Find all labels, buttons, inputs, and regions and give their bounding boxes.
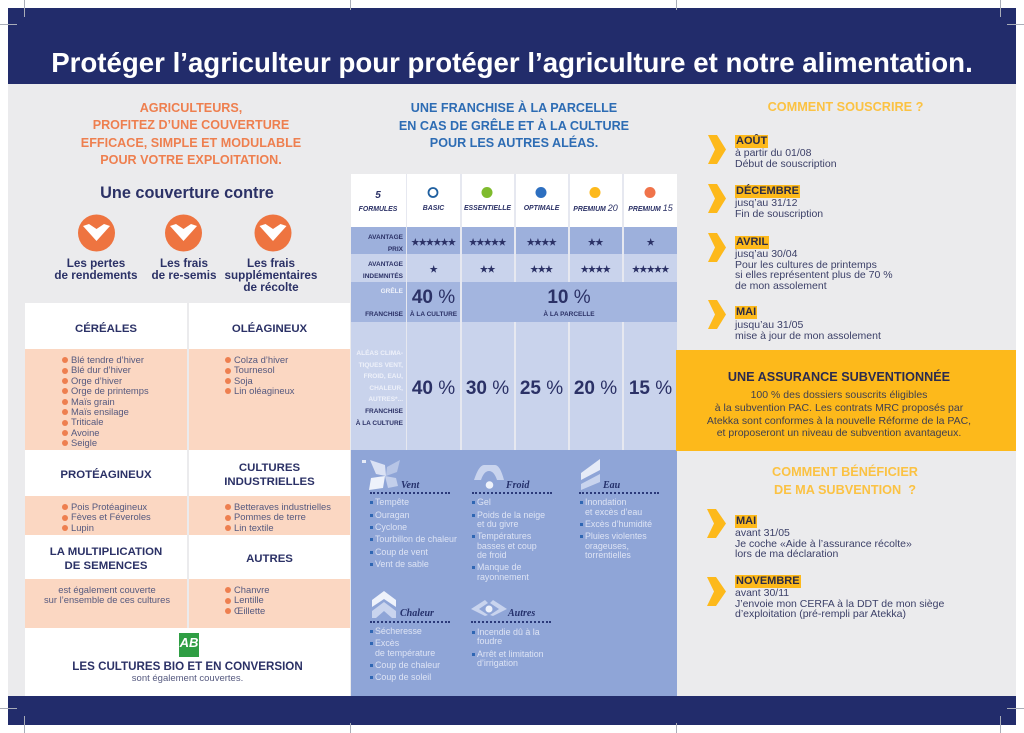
value: 40 pct: 40 % (412, 378, 455, 399)
right heading: comment beneficier: COMMENT BÉNÉFICIER (772, 465, 918, 479)
detail: à partir du 01/08 (735, 147, 811, 159)
list: autres (472, 627, 544, 668)
detail: jusq’au 30/04 (735, 248, 797, 260)
list: froid: Poids de la neige (477, 510, 545, 520)
list: chaleur: de température (375, 648, 435, 658)
month: DÉCEMBRE (736, 185, 799, 197)
right heading: comment beneficier (677, 464, 1013, 499)
list: cereales: Blé tendre d’hiver (71, 354, 144, 365)
list: cereales: Blé dur d’hiver (71, 364, 131, 375)
column separators (406, 174, 407, 450)
middle heading: POUR LES AUTRES ALÉAS. (430, 136, 598, 150)
header band with title (8, 8, 1016, 84)
heading: froid: Froid (506, 480, 529, 491)
middle heading: EN CAS DE GRÊLE ET À LA CULTURE (399, 118, 629, 132)
list: chaleur: Coup de soleil (375, 672, 431, 682)
detail (735, 247, 893, 291)
left heading: PROFITEZ D’UNE COUVERTURE (93, 118, 289, 132)
list: eau: Inondation (585, 497, 626, 507)
heading: cultures industrielles (224, 462, 315, 488)
heading: multiplication de semences (50, 546, 162, 572)
column separator (187, 303, 188, 628)
list: froid (472, 497, 545, 582)
list: chaleur (370, 626, 440, 682)
value: 20 pct: 20 % (574, 378, 617, 399)
label: frais de re-semis: de re-semis (152, 269, 216, 282)
label: aleas climatiques: ALÉAS CLIMA- (356, 350, 403, 357)
footer band (8, 696, 1016, 725)
label: frais supplementaires: de récolte (243, 281, 299, 294)
text: semences: sur l’ensemble de ces cultures (44, 594, 170, 605)
label: frais supplementaires (225, 257, 317, 294)
heading: multiplication de semences: DE SEMENCES (65, 560, 147, 572)
list: chaleur: Sécheresse (375, 626, 422, 636)
detail: avant 30/11 (735, 587, 789, 599)
list: oleagineux: Lin oléagineux (234, 385, 294, 396)
label: aleas climatiques: TIQUES VENT, (359, 362, 403, 369)
text: semences (44, 584, 170, 605)
title: Protéger l’agriculteur pour protéger l’agriculture et notre alimentation. (51, 47, 973, 78)
label: avantage indemnites: AVANTAGE (368, 261, 403, 268)
detail: Fin de souscription (735, 208, 823, 220)
icons: yellow chevrons (707, 135, 726, 606)
label: frais supplementaires: Les frais (247, 257, 295, 270)
text: semences: est également couverte (58, 584, 156, 595)
list: eau: et excès d’eau (585, 507, 642, 517)
detail: de mon assolement (735, 280, 827, 292)
list: vent: Tempête (375, 497, 409, 507)
label: 5 formules: 5 (375, 190, 381, 201)
detail: mise à jour de mon assolement (735, 330, 881, 342)
heading: eau: Eau (603, 480, 620, 491)
callout text: Atekka sont conformes à la nouvelle Réforme de la PAC, (707, 415, 971, 427)
detail (734, 197, 823, 220)
label: optimale: OPTIMALE (524, 205, 559, 212)
label: pertes de rendements (54, 257, 138, 282)
detail: d’exploitation (pré-rempli par Atekka) (735, 608, 906, 620)
list: autres (225, 584, 269, 616)
label: aleas climatiques: FROID, EAU, (364, 373, 403, 380)
label: franchise: FRANCHISE (365, 311, 403, 318)
detail: jusqu’au 31/05 (735, 319, 803, 331)
heading: proteagineux: PROTÉAGINEUX (60, 469, 152, 481)
list: oleagineux: Soja (234, 375, 253, 386)
heading: autres: AUTRES (246, 553, 293, 565)
list: cereales: Orge d’hiver (71, 375, 122, 386)
list: oleagineux (225, 354, 294, 396)
row: grele (351, 282, 677, 322)
list: chaleur: Coup de chaleur (375, 660, 440, 670)
step: mai declaration (735, 515, 925, 559)
month: AOÛT (736, 135, 767, 147)
list: froid: Températures (477, 531, 531, 541)
list: vent: Cyclone (375, 522, 407, 532)
panel: formulas table (351, 174, 677, 450)
month: NOVEMBRE (736, 575, 800, 587)
left heading: POUR VOTRE EXPLOITATION. (100, 153, 282, 167)
label: frais de re-semis: Les frais (160, 257, 208, 270)
caption: a la parcelle: À LA PARCELLE (543, 311, 595, 318)
list: eau: Pluies violentes (585, 531, 647, 541)
label: pertes de rendements: de rendements (54, 269, 138, 282)
list: eau (580, 497, 652, 560)
label: grele franchise: GRÊLE (381, 288, 403, 295)
panel: crops table (25, 303, 350, 696)
callout text: et proposeront un niveau de subvention avantageux. (717, 427, 961, 439)
label: aleas climatiques: CHALEUR, (369, 385, 403, 392)
detail: lors de ma déclaration (735, 548, 838, 560)
text: ★★ (588, 238, 603, 248)
list: cereales: Avoine (71, 427, 100, 438)
heading: chaleur: Chaleur (400, 608, 434, 619)
detail (735, 147, 837, 170)
list: autres: d’irrigation (477, 658, 518, 668)
detail: si elles représentent plus de 70 % (735, 269, 893, 281)
right heading: comment beneficier: DE MA SUBVENTION ? (774, 482, 916, 496)
label: pertes de rendements: Les pertes (67, 257, 125, 270)
list: cereales: Triticale (71, 416, 103, 427)
list: cereales: Maïs ensilage (71, 406, 129, 417)
callout heading: UNE ASSURANCE SUBVENTIONNÉE (728, 370, 950, 384)
left heading: EFFICACE, SIMPLE ET MODULABLE (81, 136, 301, 150)
detail: Début de souscription (735, 158, 837, 170)
left heading (81, 101, 301, 167)
list: vent: Tourbillon de chaleur (375, 534, 457, 544)
text: ★★★ (531, 265, 552, 275)
label: 5 formules (358, 190, 398, 213)
list: froid: de froid (477, 550, 507, 560)
label: avantage prix (368, 234, 403, 253)
list: froid: basses et coup (477, 541, 537, 551)
text: ★★★★★ (469, 238, 506, 248)
value: 15 pct: 15 % (629, 378, 672, 399)
rule: froid (472, 492, 552, 494)
label: essentielle: ESSENTIELLE (464, 205, 511, 212)
text: ★★★★★ (632, 265, 669, 275)
icons: perils (362, 459, 600, 618)
icon: AB logo (179, 633, 199, 657)
list: cultures industrielles: Betteraves industrielles (234, 501, 331, 512)
rule: eau (579, 492, 659, 494)
list: proteagineux: Lupin (71, 522, 94, 533)
list: vent: Ouragan (375, 510, 410, 520)
detail: jusq’au 31/12 (735, 197, 797, 209)
list: cultures industrielles: Lin textile (234, 522, 274, 533)
heading: cultures industrielles: INDUSTRIELLES (224, 476, 315, 488)
list: proteagineux (62, 501, 151, 533)
rule: autres (471, 620, 551, 622)
heading: multiplication de semences: LA MULTIPLICATION (50, 546, 162, 558)
text: ★ (647, 238, 654, 248)
callout text: à la subvention PAC. Les contrats MRC proposés par (715, 402, 963, 414)
list: cultures industrielles (225, 501, 331, 533)
list: vent (370, 497, 457, 569)
list: cereales: Orge de printemps (71, 385, 149, 396)
label: frais de re-semis (152, 257, 216, 282)
list: cereales: Seigle (71, 437, 97, 448)
subheading: une couverture contre: Une couverture contre (100, 184, 274, 202)
callout text (676, 389, 1002, 440)
label: aleas climatiques: FRANCHISE (365, 408, 403, 415)
list: cultures industrielles: Pommes de terre (234, 511, 306, 522)
icons: formula dots (428, 187, 656, 198)
detail (735, 528, 912, 560)
value: 40 pct grele: 40 % (412, 287, 455, 308)
right heading: comment souscrire: COMMENT SOUSCRIRE ? (768, 100, 923, 114)
rule: vent (370, 492, 450, 494)
label: avantage prix: PRIX (388, 246, 403, 253)
label: avantage indemnites (363, 261, 403, 280)
detail: Je coche «Aide à l’assurance récolte» (735, 538, 912, 550)
month: MAI (736, 515, 756, 527)
stars: indemnites: ★ (430, 265, 437, 275)
row: avantage indemnites (351, 254, 677, 282)
list: autres: Chanvre (234, 584, 269, 595)
step: aout (735, 134, 837, 170)
list: oleagineux: Colza d’hiver (234, 354, 288, 365)
heading: cereales: CÉRÉALES (75, 323, 137, 335)
label: basic: BASIC (423, 205, 444, 212)
list: eau: torrentielles (585, 550, 631, 560)
row: aleas (351, 322, 677, 450)
step: mai (735, 306, 885, 340)
callout text: 100 % des dossiers souscrits éligibles (751, 389, 927, 401)
caption: a la culture: À LA CULTURE (410, 311, 457, 318)
row: avantage prix (351, 227, 677, 254)
list: proteagineux: Fèves et Féveroles (71, 511, 151, 522)
left heading: AGRICULTEURS, (140, 101, 242, 115)
detail: J’envoie mon CERFA à la DDT de mon siège (735, 598, 944, 610)
list: proteagineux: Pois Protéagineux (71, 501, 147, 512)
step: avril (734, 236, 893, 292)
icon: AB logo: AB (180, 635, 198, 650)
heading: vent: Vent (401, 480, 419, 491)
detail (735, 320, 881, 341)
heading: oleagineux: OLÉAGINEUX (232, 323, 307, 335)
list: eau: Excès d’humidité (585, 519, 652, 529)
callout: assurance subventionnee (676, 350, 1016, 451)
list: froid: et du givre (477, 519, 518, 529)
label: aleas climatiques: À LA CULTURE (356, 420, 403, 427)
text: ★★★★ (527, 238, 556, 248)
heading: autres: Autres (508, 608, 535, 619)
detail: avant 31/05 (735, 527, 790, 539)
icons: orange chevrons (78, 214, 292, 252)
month: AVRIL (736, 236, 768, 248)
label: premium 20: PREMIUM 20 (573, 203, 618, 213)
value: 25 pct: 25 % (520, 378, 563, 399)
list: froid: Gel (477, 497, 491, 507)
list: vent: Coup de vent (375, 547, 428, 557)
heading: cultures industrielles: CULTURES (239, 462, 300, 474)
value: 10 pct grele: 10 % (547, 287, 591, 308)
label: avantage prix: AVANTAGE (368, 234, 403, 241)
detail (735, 588, 944, 620)
list: eau: orageuses, (585, 541, 629, 551)
step: novembre (735, 575, 950, 621)
value: 30 pct: 30 % (466, 378, 509, 399)
list: chaleur: Excès (375, 638, 399, 648)
label: aleas climatiques: AUTRES*... (368, 396, 403, 403)
stars: prix: ★★★★★★ (412, 238, 455, 248)
text: ★★★★ (581, 265, 610, 275)
list: autres: Lentille (234, 594, 264, 605)
list: vent: Vent de sable (375, 559, 429, 569)
text: egalement couvertes: sont également couvertes. (132, 673, 243, 684)
panel: perils (351, 450, 677, 696)
list: autres: Œillette (234, 605, 265, 616)
label: premium 15: PREMIUM 15 (628, 203, 673, 213)
label: avantage indemnites: INDEMNITÉS (363, 273, 403, 280)
label: 5 formules: FORMULES (359, 206, 397, 213)
middle heading (399, 100, 629, 150)
month: MAI (736, 306, 756, 318)
list: cereales (62, 354, 149, 448)
rule: chaleur (370, 620, 450, 622)
label: frais supplementaires: supplémentaires (225, 269, 317, 282)
list: autres: Arrêt et limitation (477, 649, 544, 659)
list: oleagineux: Tournesol (234, 364, 275, 375)
list: autres: Incendie dû à la (477, 627, 540, 637)
list: froid: Manque de (477, 562, 521, 572)
step: decembre (734, 184, 823, 220)
list: froid: rayonnement (477, 572, 529, 582)
list: autres: foudre (477, 636, 502, 646)
detail: Pour les cultures de printemps (735, 258, 877, 270)
label: aleas climatiques (356, 349, 403, 427)
text: ★★ (480, 265, 495, 275)
list: cereales: Maïs grain (71, 396, 115, 407)
middle heading: UNE FRANCHISE À LA PARCELLE (411, 101, 617, 115)
peach rows (25, 349, 350, 450)
heading: cultures bio: LES CULTURES BIO ET EN CONVERSION (72, 660, 303, 673)
